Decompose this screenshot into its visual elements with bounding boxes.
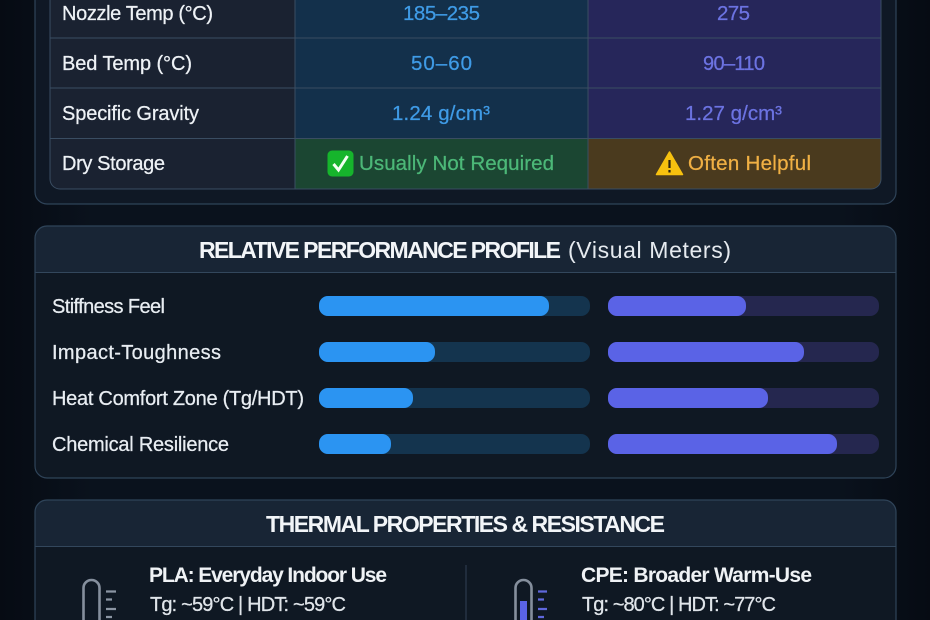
meter: impact toughness: Impact-Toughness [52,342,221,364]
row: specific gravity: 1.27 g/cm³ [685,102,782,125]
row: specific gravity: Specific Gravity [62,103,199,125]
panel: thermal properties and resistance [35,500,896,620]
meter: stiffness feel: Stiffness Feel [52,296,165,318]
row: nozzle temp [62,2,750,25]
heading: thermal properties: THERMAL PROPERTIES & RESISTANCE [266,511,665,537]
row: dry storage: Often Helpful [688,152,811,175]
row: specific gravity [62,102,782,125]
meter: impact toughness [52,342,879,364]
meter: heat comfort zone: Heat Comfort Zone (Tg/HDT) [52,388,304,410]
meter: stiffness feel [52,296,879,318]
panel: relative performance profile [35,226,896,478]
row: nozzle temp: 275 [717,2,750,25]
row: bed temp: Bed Temp (°C) [62,53,192,75]
text: PLA thermal: Tg: ~59°C | HDT: ~59°C [150,594,346,616]
row: specific gravity: 1.24 g/cm³ [392,102,490,125]
table grid [50,0,881,189]
text: CPE thermal: Tg: ~80°C | HDT: ~77°C [582,594,776,616]
meter: chemical resilience: Chemical Resilience [52,434,229,456]
row: dry storage: Dry Storage [62,153,165,175]
meter: chemical resilience [52,434,879,456]
icon: warning triangle [656,152,682,174]
heading: relative performance profile [199,237,731,263]
row: bed temp: 90–110 [703,53,765,75]
meter: heat comfort zone [52,388,879,410]
icon: green check [328,150,354,176]
row: nozzle temp: Nozzle Temp (°C) [62,3,213,25]
heading: relative performance profile: (Visual Meters) [568,237,731,263]
text: CPE thermal: CPE: Broader Warm-Use [581,564,812,587]
row: nozzle temp: 185–235 [403,2,480,25]
row: bed temp: 50–60 [411,52,472,75]
heading: relative performance profile: RELATIVE PERFORMANCE PROFILE [199,237,561,263]
row: bed temp [62,52,765,75]
icon: PLA thermometer [84,580,116,620]
row: dry storage [62,150,811,176]
text: PLA thermal: PLA: Everyday Indoor Use [149,564,387,587]
text: CPE thermal [581,564,812,616]
icon: CPE thermometer [516,580,547,620]
text: PLA thermal [149,564,387,616]
panel: properties table [35,0,896,204]
row: dry storage: Usually Not Required [359,152,554,175]
